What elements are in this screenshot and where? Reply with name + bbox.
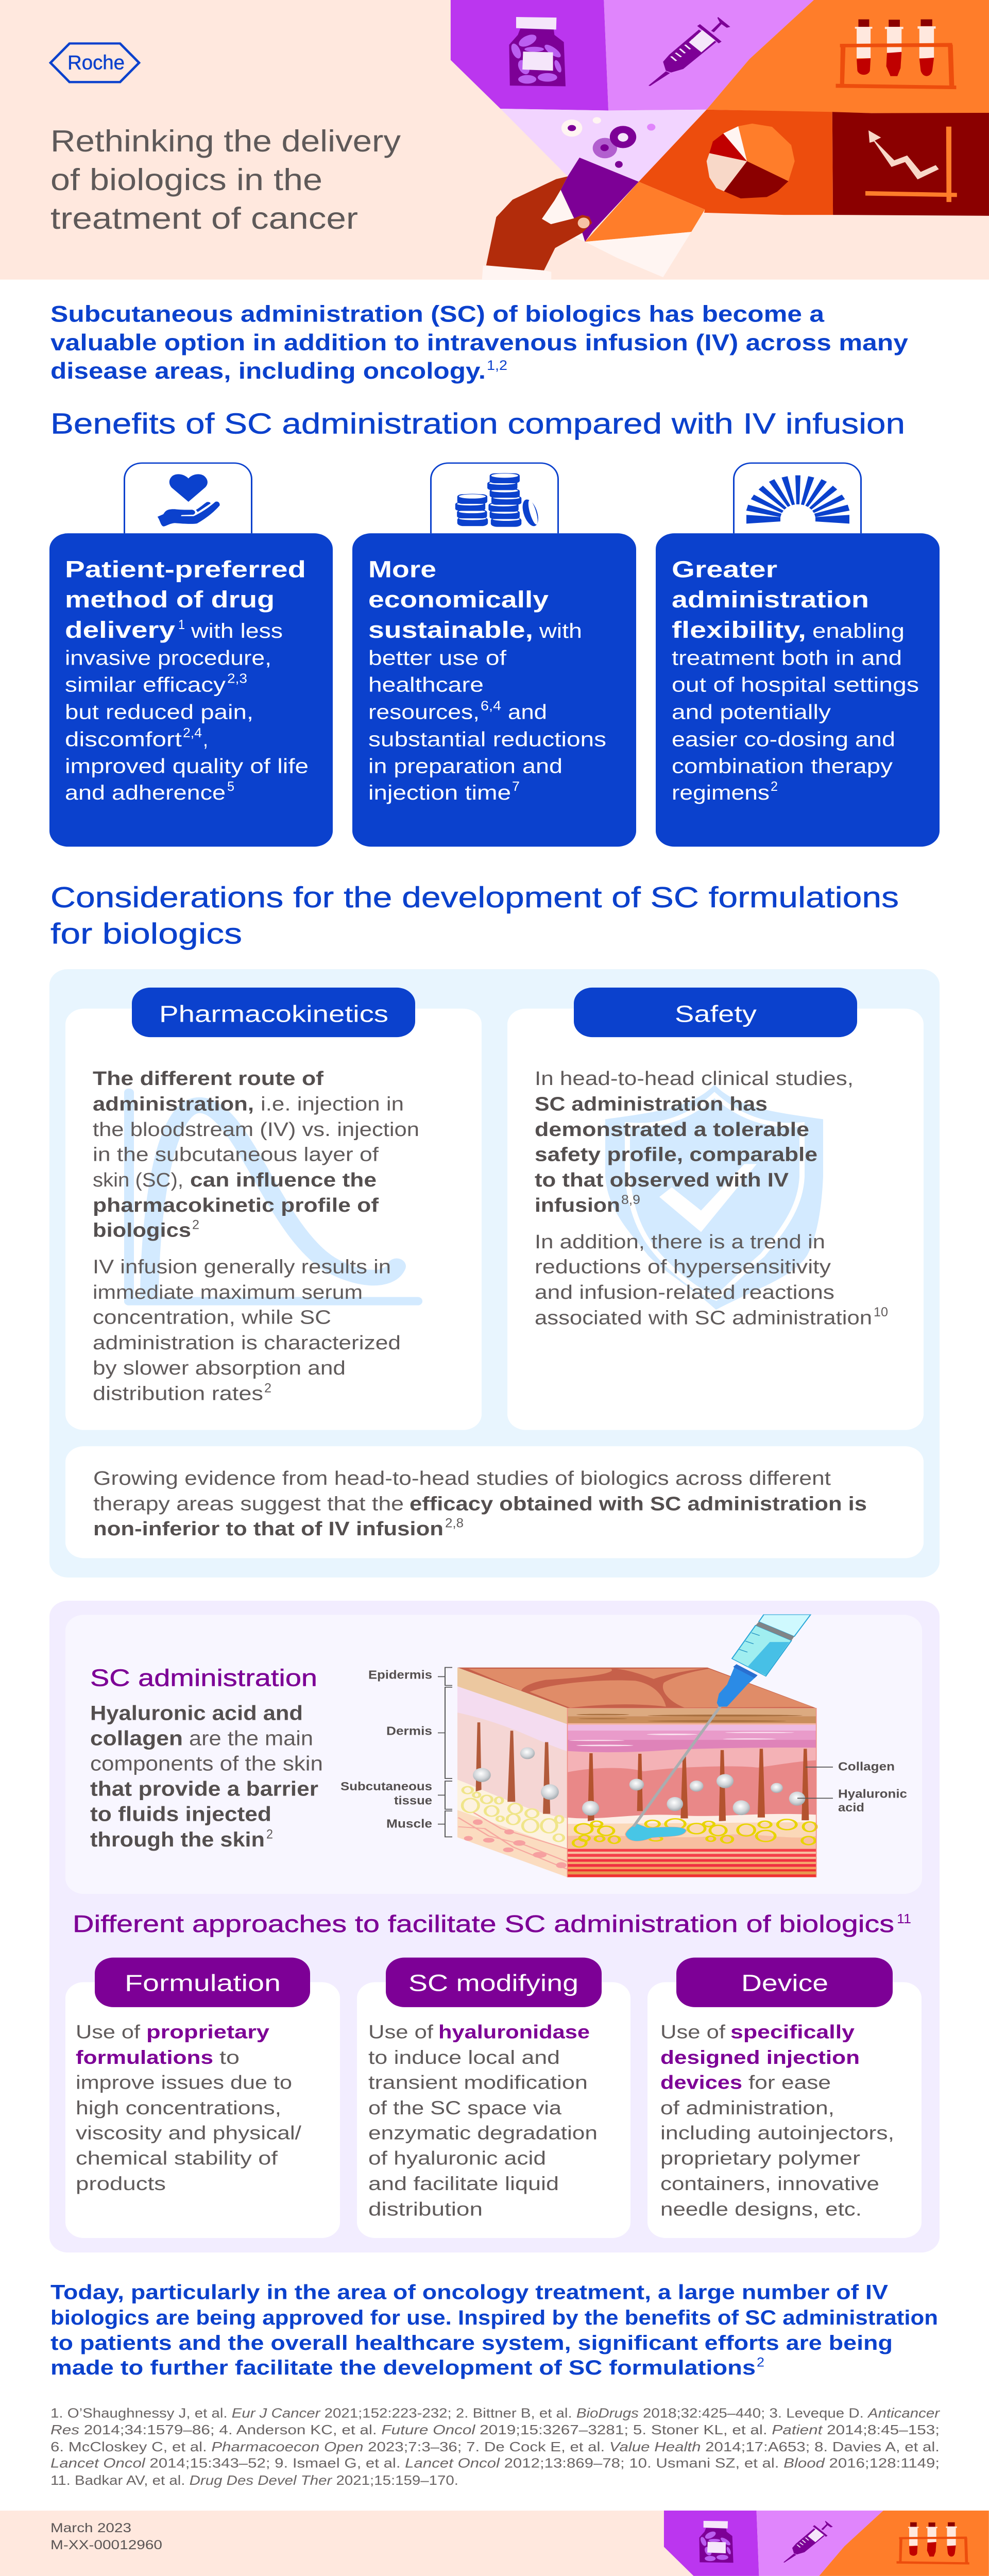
pharmacokinetics text: administration is characterized bbox=[93, 1331, 401, 1353]
SC administration text: are the main bbox=[189, 1727, 313, 1750]
references: 11. Badkar AV, et al. Drug Des Devel Ther 2021;15:159–170. bbox=[50, 2473, 458, 2487]
safety text: to that observed with IV bbox=[535, 1168, 789, 1191]
panel: economically sustainable benefit: resources, bbox=[368, 701, 480, 724]
panel: economically sustainable benefit: substantial reductions bbox=[368, 728, 606, 751]
panel: SC modifying: enzymatic degradation bbox=[368, 2122, 598, 2144]
panel: administration flexibility benefit: Greater bbox=[672, 556, 777, 582]
panel: economically sustainable benefit: better use of bbox=[368, 647, 507, 670]
pharmacokinetics text: in the subcutaneous layer of bbox=[93, 1143, 379, 1165]
intro statement: 1,2 bbox=[487, 358, 507, 374]
panel: administration flexibility benefit: 2 bbox=[771, 779, 778, 794]
panel: economically sustainable benefit: injection time bbox=[368, 781, 511, 804]
footer band bbox=[0, 2511, 989, 2576]
pharmacokinetics text: skin (SC), bbox=[93, 1168, 183, 1191]
pill: pharmacokinetics bbox=[132, 988, 415, 1037]
top row colour panels bbox=[451, 0, 989, 113]
footer illustration bbox=[664, 2511, 989, 2576]
safety text bbox=[535, 1067, 888, 1329]
references: 6. McCloskey C, et al. Pharmacoecon Open 2023;7:3–36; 7. De Cock E, et al. Value Health 2014;17:A653; 8. Davies A, et al. bbox=[50, 2439, 940, 2454]
panel: administration flexibility benefit: administration bbox=[672, 587, 869, 613]
safety text: infusion bbox=[535, 1194, 620, 1216]
panel: economically sustainable benefit: 7 bbox=[512, 779, 520, 794]
heading: considerations: Considerations for the development of SC formulations bbox=[50, 882, 899, 913]
panel: SC modifying: of the SC space via bbox=[368, 2097, 561, 2119]
panel: patient-preferred benefit: with less bbox=[191, 619, 283, 642]
panel: patient-preferred benefit bbox=[49, 533, 333, 846]
safety text: associated with SC administration bbox=[535, 1306, 872, 1329]
panel: device: needle designs, etc. bbox=[660, 2198, 862, 2220]
panel: formulation: formulations bbox=[76, 2046, 213, 2068]
SC administration text: Hyaluronic acid and bbox=[90, 1702, 303, 1725]
injected fluid bbox=[625, 1823, 686, 1841]
panel: efficacy: 2,8 bbox=[445, 1516, 464, 1530]
panel: economically sustainable benefit: and bbox=[508, 701, 547, 724]
panel: considerations background bbox=[49, 969, 940, 1578]
SC administration text: through the skin bbox=[90, 1828, 265, 1851]
pharmacokinetics text: concentration, while SC bbox=[93, 1306, 331, 1328]
dark red panel with line chart bbox=[832, 112, 989, 216]
pharmacokinetics text: IV infusion generally results in bbox=[93, 1256, 391, 1278]
panel: SC modifying: and facilitate liquid bbox=[368, 2173, 559, 2194]
bracket lines bbox=[438, 1667, 833, 1837]
skin cube: front face layers bbox=[567, 1708, 816, 1877]
panel: patient-preferred benefit: improved quality of life bbox=[65, 754, 309, 777]
Roche logo: Roche bbox=[67, 52, 125, 74]
panel: device bbox=[647, 1958, 922, 2238]
icon: bottle bbox=[509, 17, 566, 87]
diagram labels: Muscle bbox=[386, 1817, 432, 1831]
panel: patient-preferred benefit: method of drug bbox=[65, 587, 275, 613]
panel: economically sustainable benefit: healthcare bbox=[368, 673, 484, 697]
heading: considerations bbox=[50, 882, 899, 950]
safety text: SC administration has bbox=[535, 1093, 768, 1115]
heading: benefits: Benefits of SC administration compared with IV infusion bbox=[50, 408, 905, 440]
diagram labels: Collagen bbox=[838, 1760, 895, 1773]
pharmacokinetics text: immediate maximum serum bbox=[93, 1281, 363, 1303]
panel: safety bbox=[507, 988, 924, 1430]
pharmacokinetics text: can influence the bbox=[190, 1168, 377, 1191]
safety text: 10 bbox=[874, 1305, 888, 1319]
closing statement: Today, particularly in the area of oncology treatment, a large number of IV bbox=[50, 2281, 888, 2304]
diagram labels: Dermis bbox=[386, 1725, 432, 1738]
panel: administration flexibility benefit: out of hospital settings bbox=[672, 673, 919, 697]
footer text bbox=[50, 2521, 162, 2552]
panel: patient-preferred benefit: discomfort bbox=[65, 728, 182, 751]
safety text: reductions of hypersensitivity bbox=[535, 1256, 831, 1278]
title: treatment of cancer bbox=[50, 201, 358, 235]
panel: patient-preferred benefit: 2,3 bbox=[227, 671, 247, 686]
pill: device: Device bbox=[741, 1970, 828, 1996]
heading: considerations: for biologics bbox=[50, 918, 242, 950]
closing statement: 2 bbox=[757, 2355, 764, 2369]
SC administration text: 2 bbox=[266, 1827, 273, 1841]
panel: administration flexibility benefit: flexibility, bbox=[672, 617, 806, 643]
icon tab: flexibility rays bbox=[734, 463, 861, 533]
panel: patient-preferred benefit: but reduced pain, bbox=[65, 701, 253, 724]
syringe bbox=[634, 1615, 811, 1827]
SC administration text bbox=[90, 1702, 323, 1851]
SC administration text: collagen bbox=[90, 1727, 183, 1750]
panel: SC modifying bbox=[357, 1958, 630, 2238]
safety text: safety profile, comparable bbox=[535, 1143, 817, 1165]
top row icons: bottle, syringe, test tubes bbox=[509, 17, 956, 89]
intro statement: Subcutaneous administration (SC) of biologics has become a bbox=[50, 301, 825, 327]
heading: different approaches: 11 bbox=[897, 1911, 911, 1926]
diagram labels: tissue bbox=[394, 1794, 432, 1807]
panel: device: designed injection bbox=[660, 2046, 860, 2068]
panel: economically sustainable benefit: sustainable, bbox=[368, 617, 533, 643]
header illustration bbox=[451, 0, 989, 279]
panel: administration flexibility benefit: and potentially bbox=[672, 701, 831, 724]
icon: syringe bbox=[649, 17, 730, 86]
Roche logo bbox=[50, 43, 139, 82]
pill: SC modifying bbox=[386, 1958, 602, 2007]
panel: formulation: proprietary bbox=[146, 2021, 269, 2043]
panel: formulation: improve issues due to bbox=[76, 2071, 292, 2093]
pill: formulation: Formulation bbox=[125, 1970, 281, 1996]
panel: SC modifying: transient modification bbox=[368, 2071, 588, 2093]
panel: formulation bbox=[65, 1958, 340, 2238]
pill: SC modifying: SC modifying bbox=[408, 1970, 578, 1996]
panel: economically sustainable benefit: 6,4 bbox=[481, 699, 501, 713]
panel: administration flexibility benefit: combination therapy bbox=[672, 754, 893, 777]
skin cube: left face bbox=[457, 1668, 567, 1877]
footer text: March 2023 bbox=[50, 2521, 131, 2535]
skin cube: top face bbox=[457, 1668, 816, 1708]
panel: efficacy: therapy areas suggest that the bbox=[93, 1493, 404, 1515]
diagram labels: Subcutaneous bbox=[340, 1780, 432, 1793]
intro statement bbox=[50, 301, 908, 384]
references: 1. O’Shaughnessy J, et al. Eur J Cancer 2021;152:223-232; 2. Bittner B, et al. BioDrugs 2018;32:425–440; 3. Leveque D. Anticancer bbox=[50, 2406, 941, 2420]
panel: device: containers, innovative bbox=[660, 2173, 879, 2194]
icon: pharmacokinetic curve watermark bbox=[124, 1089, 422, 1306]
heading: different approaches: Different approaches to facilitate SC administration of biologics bbox=[73, 1911, 894, 1937]
closing statement: to patients and the overall healthcare system, significant efforts are being bbox=[50, 2331, 893, 2354]
safety text: 8,9 bbox=[621, 1193, 640, 1207]
title: of biologics in the bbox=[50, 162, 322, 197]
SC administration text: that provide a barrier bbox=[90, 1777, 318, 1800]
dark orange panel with pie chart bbox=[639, 110, 833, 215]
pharmacokinetics text: pharmacokinetic profile of bbox=[93, 1194, 379, 1216]
safety text: demonstrated a tolerable bbox=[535, 1118, 809, 1140]
panel: administration flexibility benefit: easier co-dosing and bbox=[672, 728, 895, 751]
diagram labels: Hyaluronic bbox=[838, 1787, 907, 1801]
icon: shield watermark bbox=[605, 1084, 823, 1310]
pharmacokinetics text: administration, bbox=[93, 1093, 254, 1115]
panel: efficacy: Growing evidence from head-to-head studies of biologics across different bbox=[93, 1467, 831, 1489]
pharmacokinetics text: i.e. injection in bbox=[261, 1093, 404, 1115]
panel: administration flexibility benefit: treatment both in and bbox=[672, 647, 902, 670]
panel: patient-preferred benefit: and adherence bbox=[65, 781, 226, 804]
panel: patient-preferred benefit: Patient-preferred bbox=[65, 556, 306, 582]
safety text: and infusion-related reactions bbox=[535, 1281, 834, 1303]
references bbox=[50, 2406, 941, 2487]
references: Res 2014;34:1579–86; 4. Anderson KC, et al. Future Oncol 2019;15:3267–3281; 5. Stoner KL, et al. Patient 2014;8:45–153; bbox=[50, 2422, 940, 2437]
panel: efficacy: non-inferior to that of IV infusion bbox=[93, 1517, 444, 1539]
panel: economically sustainable benefit bbox=[352, 533, 636, 846]
pill: pharmacokinetics: Pharmacokinetics bbox=[159, 1001, 388, 1027]
SC administration text: components of the skin bbox=[90, 1752, 323, 1775]
panel: administration flexibility benefit: enabling bbox=[812, 619, 905, 642]
title: Rethinking the delivery bbox=[50, 124, 401, 158]
panel: efficacy bbox=[65, 1446, 924, 1558]
pharmacokinetics text: distribution rates bbox=[93, 1382, 263, 1404]
panel: economically sustainable benefit: More bbox=[368, 556, 436, 582]
header band bbox=[0, 0, 989, 280]
panel: SC modifying: of hyaluronic acid bbox=[368, 2147, 546, 2169]
diagram labels bbox=[340, 1668, 907, 1831]
panel: device: including autoinjectors, bbox=[660, 2122, 894, 2144]
title bbox=[50, 124, 401, 235]
diagram labels: Epidermis bbox=[368, 1668, 432, 1682]
intro statement: valuable option in addition to intravenous infusion (IV) across many bbox=[50, 330, 908, 355]
heading: SC administration: SC administration bbox=[90, 1665, 317, 1691]
safety text: In addition, there is a trend in bbox=[535, 1230, 825, 1252]
pharmacokinetics text: biologics bbox=[93, 1219, 191, 1241]
icon tab: heart in hand bbox=[125, 463, 251, 533]
icon tab: coins bbox=[431, 463, 558, 533]
panel: device: of administration, bbox=[660, 2097, 834, 2119]
panel: patient-preferred benefit: 1 bbox=[178, 617, 185, 632]
skin cross-section diagram with syringe bbox=[457, 1615, 816, 1877]
panel: patient-preferred benefit: 2,4 bbox=[183, 725, 202, 740]
panel: patient-preferred benefit: , bbox=[203, 728, 208, 751]
references: Lancet Oncol 2014;15:343–52; 9. Ismael G, et al. Lancet Oncol 2012;13:869–78; 10. Usmani SZ, et al. Blood 2016;128:1149; bbox=[50, 2456, 940, 2470]
panel: formulation: viscosity and physical/ bbox=[76, 2122, 302, 2144]
panel: device: for ease bbox=[748, 2071, 831, 2093]
panel: SC administration card bbox=[65, 1615, 922, 1894]
panel: economically sustainable benefit: economically bbox=[368, 587, 549, 613]
icon: test tubes bbox=[836, 20, 956, 89]
pharmacokinetics text bbox=[93, 1067, 419, 1404]
panel: pharmacokinetics bbox=[65, 988, 482, 1430]
panel: administration flexibility benefit: regimens bbox=[672, 781, 770, 804]
footer text: M-XX-00012960 bbox=[50, 2538, 162, 2552]
panel: patient-preferred benefit: similar efficacy bbox=[65, 673, 226, 697]
closing statement bbox=[50, 2281, 938, 2379]
hand holding leaflet bbox=[482, 158, 705, 279]
pill: safety bbox=[574, 988, 857, 1037]
panel: patient-preferred benefit: 5 bbox=[227, 779, 234, 794]
panel: administration flexibility benefit bbox=[656, 533, 940, 846]
panel: SC modifying: hyaluronidase bbox=[438, 2021, 590, 2043]
pharmacokinetics text: 2 bbox=[264, 1381, 271, 1395]
light panel with cells bbox=[501, 109, 707, 182]
panel: SC modifying: distribution bbox=[368, 2198, 483, 2220]
panel: formulation: high concentrations, bbox=[76, 2097, 281, 2119]
pharmacokinetics text: The different route of bbox=[93, 1067, 323, 1089]
SC administration text: to fluids injected bbox=[90, 1803, 271, 1826]
panel: patient-preferred benefit: invasive procedure, bbox=[65, 647, 271, 670]
panel: SC modifying: Use of bbox=[368, 2021, 434, 2043]
diagram labels: acid bbox=[838, 1801, 864, 1814]
pill: device bbox=[676, 1958, 893, 2007]
safety text: In head-to-head clinical studies, bbox=[535, 1067, 854, 1089]
panel: device: proprietary polymer bbox=[660, 2147, 860, 2169]
closing statement: biologics are being approved for use. Inspired by the benefits of SC administration bbox=[50, 2306, 938, 2329]
closing statement: made to further facilitate the development of SC formulations bbox=[50, 2356, 756, 2379]
panel: patient-preferred benefit: delivery bbox=[65, 617, 176, 643]
panel: SC administration background bbox=[49, 1601, 940, 2252]
panel: formulation: Use of bbox=[76, 2021, 141, 2043]
panel: economically sustainable benefit: in preparation and bbox=[368, 754, 562, 777]
pill: safety: Safety bbox=[675, 1001, 757, 1027]
panel: device: Use of bbox=[660, 2021, 726, 2043]
panel: efficacy: efficacy obtained with SC administration is bbox=[410, 1493, 867, 1515]
intro statement: disease areas, including oncology. bbox=[50, 359, 486, 384]
panel: formulation: chemical stability of bbox=[76, 2147, 278, 2169]
pharmacokinetics text: the bloodstream (IV) vs. injection bbox=[93, 1118, 419, 1140]
panel: SC modifying: to induce local and bbox=[368, 2046, 560, 2068]
panel: formulation: products bbox=[76, 2173, 166, 2194]
pharmacokinetics text: by slower absorption and bbox=[93, 1357, 346, 1379]
pill: formulation bbox=[95, 1958, 310, 2007]
pharmacokinetics text: 2 bbox=[192, 1217, 199, 1232]
panel: device: specifically bbox=[730, 2021, 855, 2043]
panel: device: devices bbox=[660, 2071, 742, 2093]
panel: economically sustainable benefit: with bbox=[539, 619, 582, 642]
panel: formulation: to bbox=[219, 2046, 240, 2068]
